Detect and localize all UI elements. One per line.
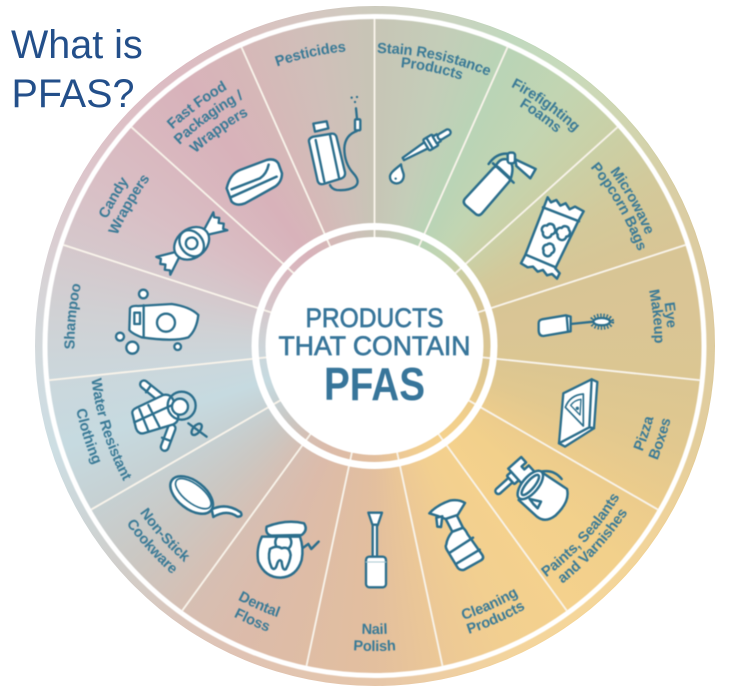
label: Pesticides: Pesticides bbox=[274, 42, 346, 67]
center heading: PRODUCTS bbox=[306, 303, 444, 333]
label: Paints, Sealants and Varnishes: Paints, Sealants bbox=[540, 493, 620, 578]
title: What is bbox=[11, 23, 143, 67]
label: Nail Polish: Polish bbox=[353, 639, 396, 652]
icon: mascara bbox=[539, 315, 612, 336]
label: Paints, Sealants and Varnishes: and Varnishes bbox=[558, 508, 628, 584]
label: Dental Floss bbox=[234, 590, 281, 632]
label: Fast Food Packaging / Wrappers: Wrappers bbox=[188, 108, 248, 152]
label: Eye Makeup: Makeup bbox=[648, 288, 664, 344]
label: Shampoo: Shampoo bbox=[63, 283, 81, 350]
icon: pizza box bbox=[559, 379, 597, 447]
icon: nail polish bbox=[366, 513, 386, 587]
label: Fast Food Packaging / Wrappers: Fast Food bbox=[166, 80, 228, 130]
label: Candy Wrappers: Wrappers bbox=[108, 174, 150, 234]
label: Pizza Boxes: Boxes bbox=[648, 418, 671, 460]
label: Water Resistant Clothing: Water Resistant bbox=[91, 377, 132, 482]
icon: water resistant jacket bbox=[132, 384, 207, 447]
icon: dental floss bbox=[258, 522, 319, 578]
label: Microwave Popcorn Bags: Microwave bbox=[610, 166, 653, 234]
label: Pizza Boxes: Pizza bbox=[632, 416, 654, 452]
label: Non-Stick Cookware: Cookware bbox=[128, 519, 176, 574]
label: Firefighting Foams: Foams bbox=[519, 98, 561, 132]
label: Nail Polish bbox=[353, 622, 396, 652]
icon: dropper bbox=[390, 125, 453, 183]
label: Candy Wrappers: Candy bbox=[98, 176, 129, 218]
label: Stain Resistance Products: Products bbox=[400, 56, 463, 80]
label: Cleaning Products bbox=[461, 588, 525, 634]
label: Dental Floss: Floss bbox=[234, 608, 270, 632]
label: Dental Floss: Dental bbox=[238, 590, 281, 618]
icon: spray bottle bbox=[429, 500, 483, 570]
label: Cleaning Products: Products bbox=[466, 602, 525, 634]
icon: candy bbox=[153, 209, 230, 278]
label: Eye Makeup: Eye bbox=[662, 302, 676, 328]
center heading: THAT CONTAIN bbox=[278, 331, 470, 361]
label: Firefighting Foams: Firefighting bbox=[511, 78, 580, 133]
label: Cleaning Products: Cleaning bbox=[461, 588, 519, 620]
icon: frying pan bbox=[164, 469, 241, 521]
title: PFAS? bbox=[12, 72, 134, 116]
label: Fast Food Packaging / Wrappers: Packaging / bbox=[173, 88, 242, 145]
icon: sprayer bbox=[309, 96, 360, 190]
center heading: PFAS bbox=[324, 358, 425, 410]
label: Water Resistant Clothing: Clothing bbox=[76, 408, 101, 465]
label: Eye Makeup bbox=[648, 288, 676, 344]
center heading bbox=[278, 303, 470, 410]
icon: popcorn bag bbox=[521, 197, 584, 279]
icon: fire extinguisher bbox=[464, 153, 536, 215]
icon: shampoo bottle bbox=[116, 290, 198, 354]
icon: paint bucket bbox=[513, 467, 568, 520]
icon: food box bbox=[227, 159, 282, 205]
center white disc bbox=[266, 237, 484, 455]
label: Pizza Boxes bbox=[632, 416, 671, 460]
label: Stain Resistance Products: Stain Resistance bbox=[377, 42, 491, 76]
label: Non-Stick Cookware: Non-Stick bbox=[140, 507, 190, 563]
label: Nail Polish: Nail bbox=[362, 622, 388, 635]
icon: paint brush bbox=[489, 457, 535, 500]
label: Microwave Popcorn Bags: Popcorn Bags bbox=[590, 161, 646, 251]
